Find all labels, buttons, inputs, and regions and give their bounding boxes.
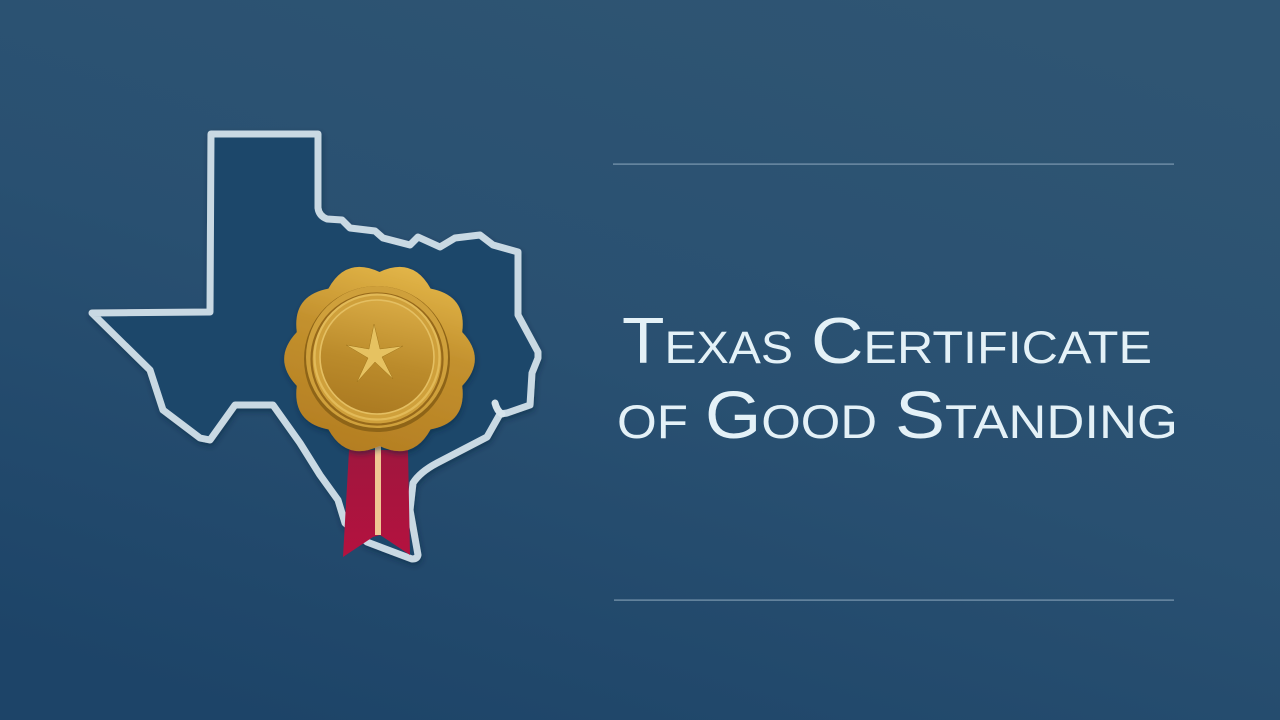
title line 2: GOOD (705, 378, 877, 453)
title line 1: CERTIFICATE (811, 304, 1152, 377)
seal inner disc (320, 300, 434, 414)
top divider line (613, 164, 1174, 165)
seal scalloped edge (284, 267, 475, 451)
title (617, 304, 1178, 453)
title line 1: TEXAS (622, 304, 793, 377)
bottom divider line (614, 600, 1174, 601)
seal outer ring (304, 286, 450, 432)
ribbon (343, 445, 410, 557)
Texas state outline (92, 134, 538, 559)
gold seal (284, 267, 475, 451)
title line 1 (622, 304, 1152, 377)
ribbon stripe (375, 445, 381, 535)
seal star (346, 324, 403, 382)
title line 2: STANDING (895, 378, 1178, 453)
title line 2: OF (617, 395, 688, 448)
title line 2 (617, 378, 1178, 453)
Gulf coast inlet detail (495, 403, 502, 414)
